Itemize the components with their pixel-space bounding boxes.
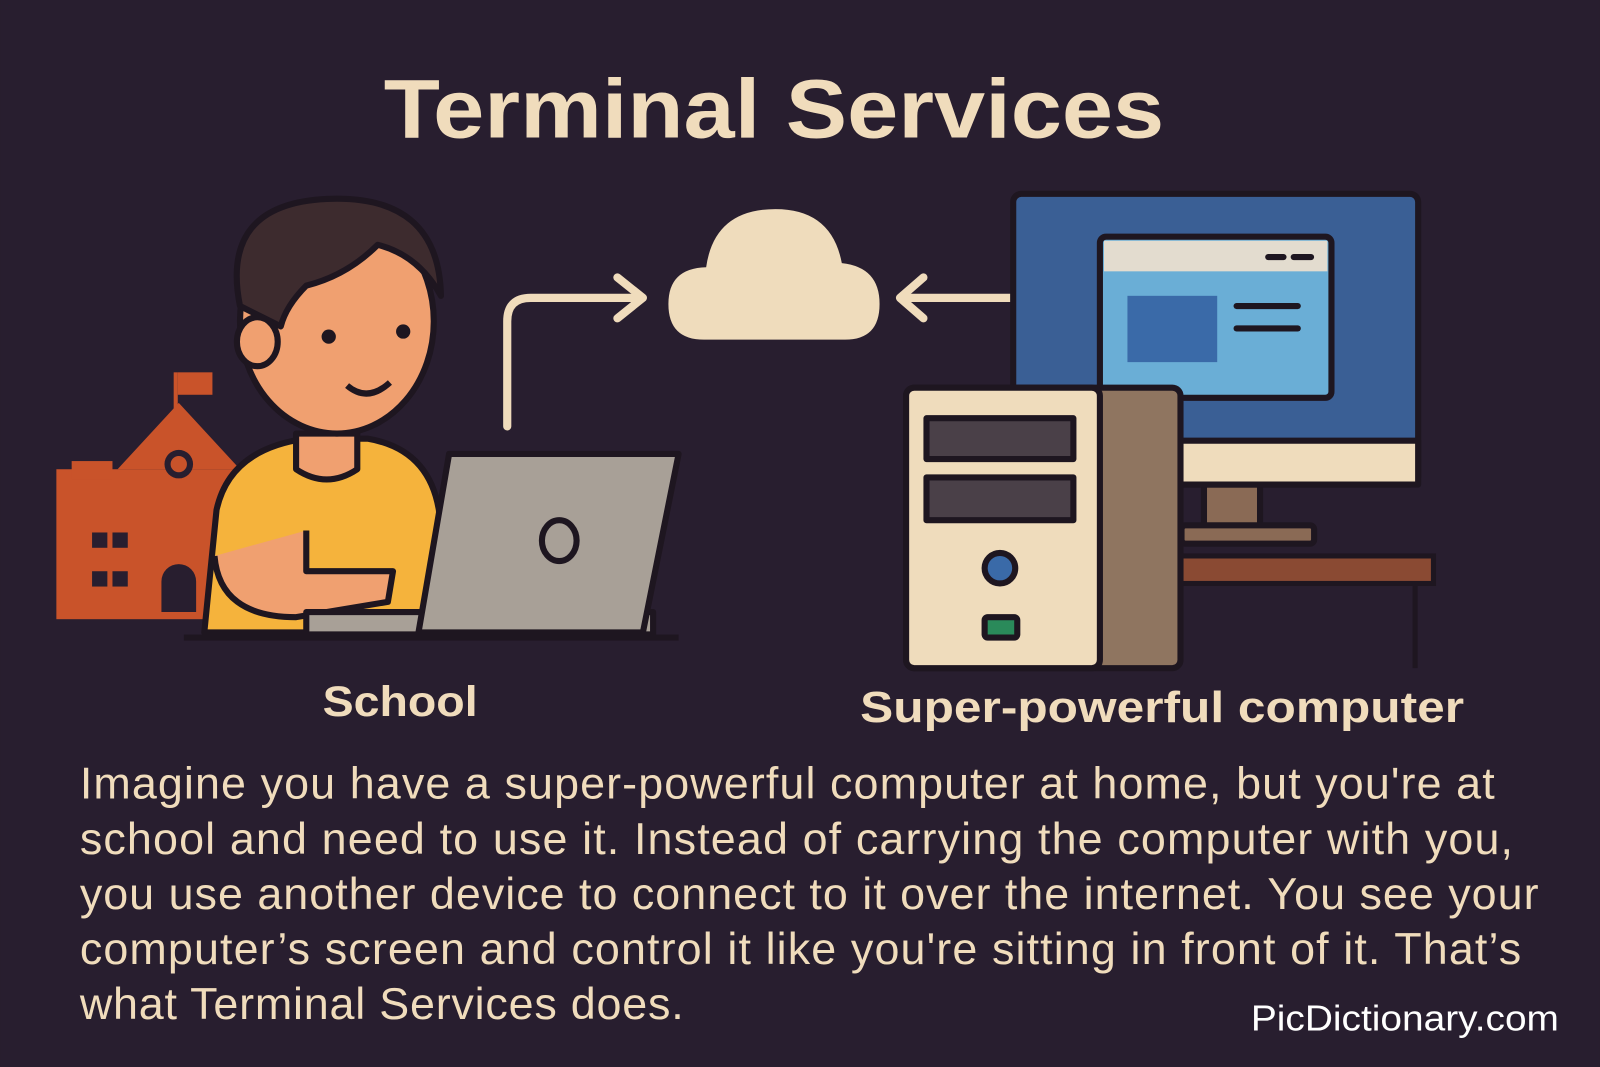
icon: monitor — [1013, 194, 1418, 544]
icon: desk — [1173, 556, 1433, 668]
arrow: computer to cloud — [900, 277, 1010, 318]
text block: explanation: what Terminal Services does. — [79, 978, 684, 1029]
arrow: laptop to cloud — [507, 277, 643, 426]
icon: boy with laptop — [184, 199, 679, 638]
text block: explanation — [79, 758, 1539, 1029]
title: Terminal Services — [384, 62, 1164, 156]
watermark: PicDictionary.com — [1251, 998, 1559, 1038]
label: super-powerful computer: Super-powerful computer — [860, 683, 1464, 732]
icon: school building — [56, 372, 240, 619]
text block: explanation: computer’s screen and control it like you're sitting in front of it. That’s — [80, 923, 1521, 974]
icon: cloud — [668, 209, 880, 340]
text block: explanation: you use another device to connect to it over the internet. You see your — [80, 868, 1539, 919]
text block: explanation: school and need to use it. Instead of carrying the computer with you, — [80, 813, 1513, 864]
text block: explanation: Imagine you have a super-powerful computer at home, but you're at — [80, 758, 1495, 809]
icon: computer tower — [906, 388, 1180, 668]
label: school: School — [323, 678, 478, 726]
